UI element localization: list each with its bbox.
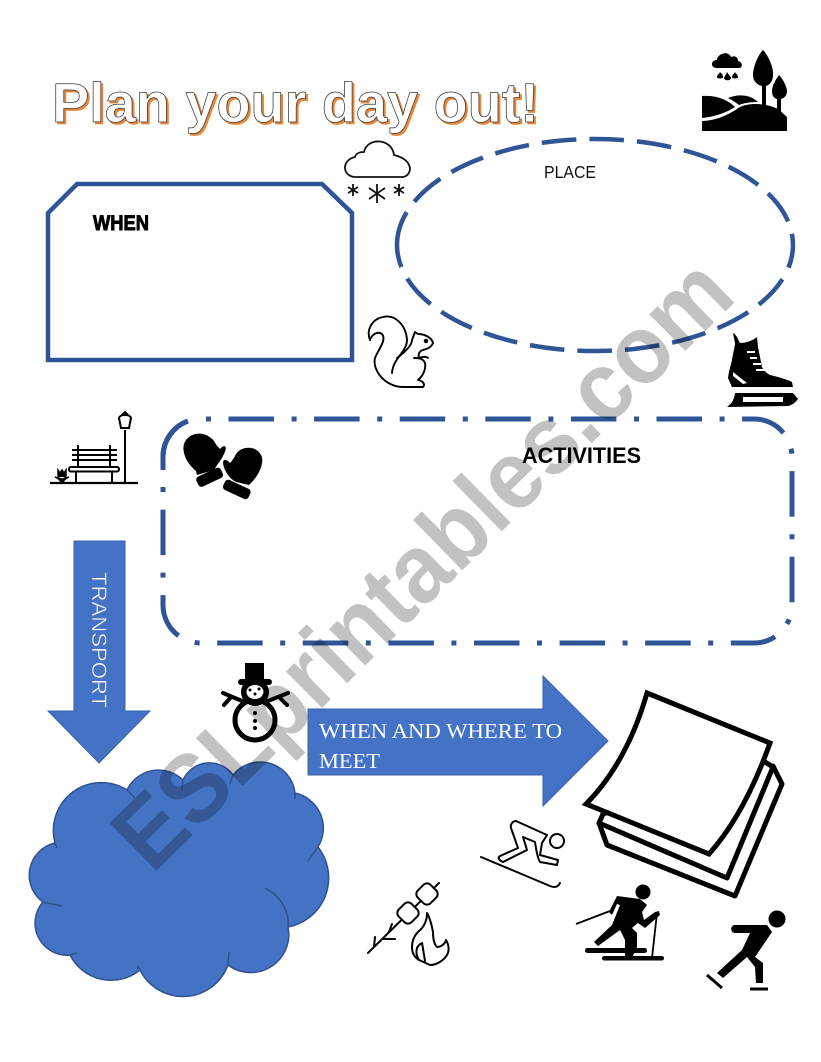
label: when and where to meet: WHEN AND WHERE TO	[319, 719, 562, 743]
shape: blue cloud	[29, 762, 329, 997]
icon: marshmallows on a stick and fire	[368, 881, 449, 965]
arrow: transport	[48, 541, 150, 763]
heading: when: WHEN	[93, 212, 149, 235]
icon: stack of notes	[586, 693, 782, 896]
icon: snow cloud	[345, 141, 410, 203]
icon: landscape with trees and rain	[702, 50, 787, 131]
icon: snowman	[223, 663, 288, 740]
panel: activities	[163, 419, 792, 643]
panel: place ellipse	[397, 139, 793, 351]
arrow: when and where to meet	[308, 676, 608, 806]
icon: ice skate	[727, 333, 798, 407]
panel: when box	[48, 184, 352, 360]
label: when and where to meet: MEET	[319, 749, 380, 773]
heading: activities: ACTIVITIES	[522, 443, 641, 468]
icon: squirrel	[369, 317, 433, 387]
title: Plan your day out!	[54, 73, 541, 136]
icon: cross-country skier	[576, 884, 664, 960]
icon: mittens	[183, 434, 262, 500]
heading: place: PLACE	[544, 162, 596, 182]
icon: park bench and lamp	[50, 412, 138, 483]
icon: downhill skier	[481, 821, 564, 887]
label: transport: TRANSPORT	[87, 572, 110, 708]
watermark: ESLprintables.com	[90, 236, 753, 890]
title: Plan your day out!	[52, 71, 539, 134]
icon: speed skater	[707, 910, 786, 989]
